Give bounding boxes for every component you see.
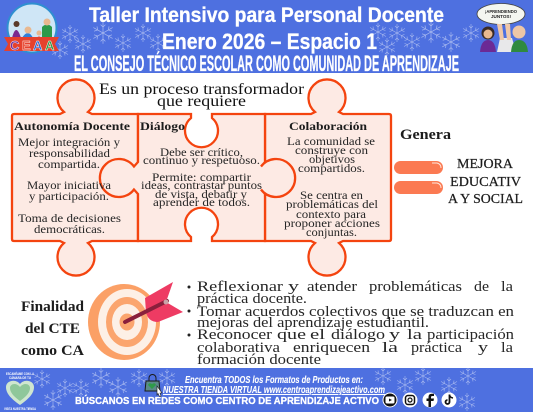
text: autonomía docente: y participación.: [29, 189, 109, 203]
heading: genera: Genera: [400, 127, 452, 143]
piece: right: [265, 79, 391, 276]
text: diálogo: de vista, debatir y: [155, 187, 247, 201]
text: autonomía docente: Mayor iniciativa: [27, 178, 112, 192]
social icons: [383, 392, 456, 408]
text: colaboración: compartidos.: [298, 161, 365, 175]
list: purposes: que: [277, 327, 306, 343]
illustration: aprendiendo juntos: JUNTOS!: [491, 14, 512, 19]
heading: finalidad del CTE como CA: Finalidad: [21, 299, 85, 315]
text: colaboración: Se centra en: [300, 188, 363, 202]
text: colaboración: [284, 119, 380, 239]
footer text: Encuentra TODOS los Formatos de Productos en:: [185, 375, 363, 386]
heading: proceso transformador: Es un proceso transformador: [99, 81, 305, 98]
icon: target with arrow: [88, 282, 183, 360]
text: colaboración: conjuntas.: [306, 225, 357, 239]
list: purposes: problemáticas: [369, 279, 462, 295]
logo: CEAA: A: [33, 38, 43, 53]
list: purposes: práctica: [411, 340, 462, 356]
text: colaboración: construye con: [295, 143, 368, 157]
footer text: NUESTRA TIENDA VIRTUAL www.centroaprendizajeactivo.com: [163, 385, 385, 396]
text: autonomía docente: democráticas.: [34, 222, 105, 236]
footer text: BÚSCANOS EN REDES COMO CENTRO DE APRENDIZAJE ACTIVO: [75, 394, 379, 407]
list: purposes: y: [389, 327, 401, 343]
logo: CEAA: C: [10, 38, 20, 53]
list: purposes: de: [474, 279, 489, 295]
text: autonomía docente: responsabilidad: [29, 146, 110, 160]
icon: shopping bag: [145, 375, 162, 396]
logo: CEAA: A: [45, 38, 55, 53]
text: mejora educativa y social: EDUCATIV: [450, 175, 521, 190]
icon: equals sign: [394, 161, 443, 194]
list: purposes: práctica docente.: [197, 291, 307, 307]
text: colaboración: objetivos: [309, 152, 355, 166]
QR code heart: VISITA NUESTRA TIENDA: [4, 407, 36, 411]
heading: finalidad del CTE como CA: del CTE: [25, 321, 80, 337]
text: autonomía docente: Toma de decisiones: [18, 211, 121, 225]
text: autonomía docente: Mejor integración y: [18, 135, 120, 149]
text: autonomía docente: Autonomía Docente: [14, 119, 131, 133]
list: purposes: la: [501, 279, 513, 295]
list: purposes: enriquecen: [293, 340, 371, 356]
footer band: [0, 367, 533, 412]
text: colaboración: contexto para: [296, 207, 367, 221]
list: purposes: mejoras del aprendizaje estudiantil.: [197, 315, 429, 331]
title line 2: Enero 2026 – Espacio 1: [162, 29, 377, 54]
list: purposes: Reconocer: [197, 327, 272, 343]
QR code heart: CÁMARA DE TU: [9, 375, 31, 380]
list: purposes: Reflexionar: [197, 279, 283, 295]
text: mejora educativa y social: [448, 157, 523, 207]
text: mejora educativa y social: MEJORA: [457, 157, 514, 172]
heading: finalidad del CTE como CA: [21, 299, 85, 359]
list: purposes: formación docente: [197, 352, 321, 368]
illustration: aprendiendo juntos: ¡APRENDIENDO: [485, 9, 517, 14]
list: purposes: el: [310, 327, 325, 343]
illustration: aprendiendo juntos: [477, 4, 528, 52]
logo: CEAA: E: [22, 38, 31, 53]
text: colaboración: proponer acciones: [284, 216, 380, 230]
text: diálogo: Debe ser crítico,: [160, 145, 243, 159]
text: colaboración: problemáticas del: [286, 197, 379, 211]
QR code heart: ESCANÉAME CON LA: [6, 371, 34, 376]
text: diálogo: ideas, contrastar puntos: [141, 178, 262, 192]
heading: finalidad del CTE como CA: como CA: [21, 343, 84, 359]
list: purposes: participación: [427, 327, 515, 343]
list: purposes: diálogo: [331, 327, 385, 343]
piece: left: [12, 79, 138, 276]
text: diálogo: Diálogo: [140, 119, 185, 133]
list: purposes: y: [288, 279, 300, 295]
text: mejora educativa y social: A Y SOCIAL: [448, 192, 523, 207]
list: purposes: [188, 279, 515, 368]
text: diálogo: continuo y respetuoso.: [143, 153, 260, 167]
puzzle: [12, 79, 391, 276]
text: colaboración: La comunidad se: [287, 134, 375, 148]
footer text: [75, 375, 385, 407]
list: purposes: Tomar acuerdos colectivos que se traduzcan en: [197, 304, 515, 320]
text: colaboración: Colaboración: [289, 119, 367, 133]
list: purposes: y: [478, 340, 489, 356]
text: diálogo: aprender de todos.: [153, 195, 250, 209]
text: diálogo: Permite: compartir: [152, 170, 251, 184]
list: purposes: la: [407, 327, 422, 343]
logo: CEAA: [4, 4, 59, 53]
text: autonomía docente: [14, 119, 131, 236]
title line 1: Taller Intensivo para Personal Docente: [89, 4, 444, 27]
heading: proceso transformador: [99, 81, 305, 110]
header band: [0, 0, 533, 73]
heading: proceso transformador: que requiere: [157, 93, 246, 110]
list: purposes: la: [382, 340, 399, 356]
text: diálogo: [140, 119, 262, 209]
piece: middle: [100, 114, 295, 241]
QR code heart: [4, 371, 36, 411]
list: purposes: la: [501, 340, 513, 356]
list: purposes: atender: [307, 279, 357, 295]
text: autonomía docente: compartida.: [38, 157, 100, 171]
list: purposes: colaborativa: [197, 340, 280, 356]
